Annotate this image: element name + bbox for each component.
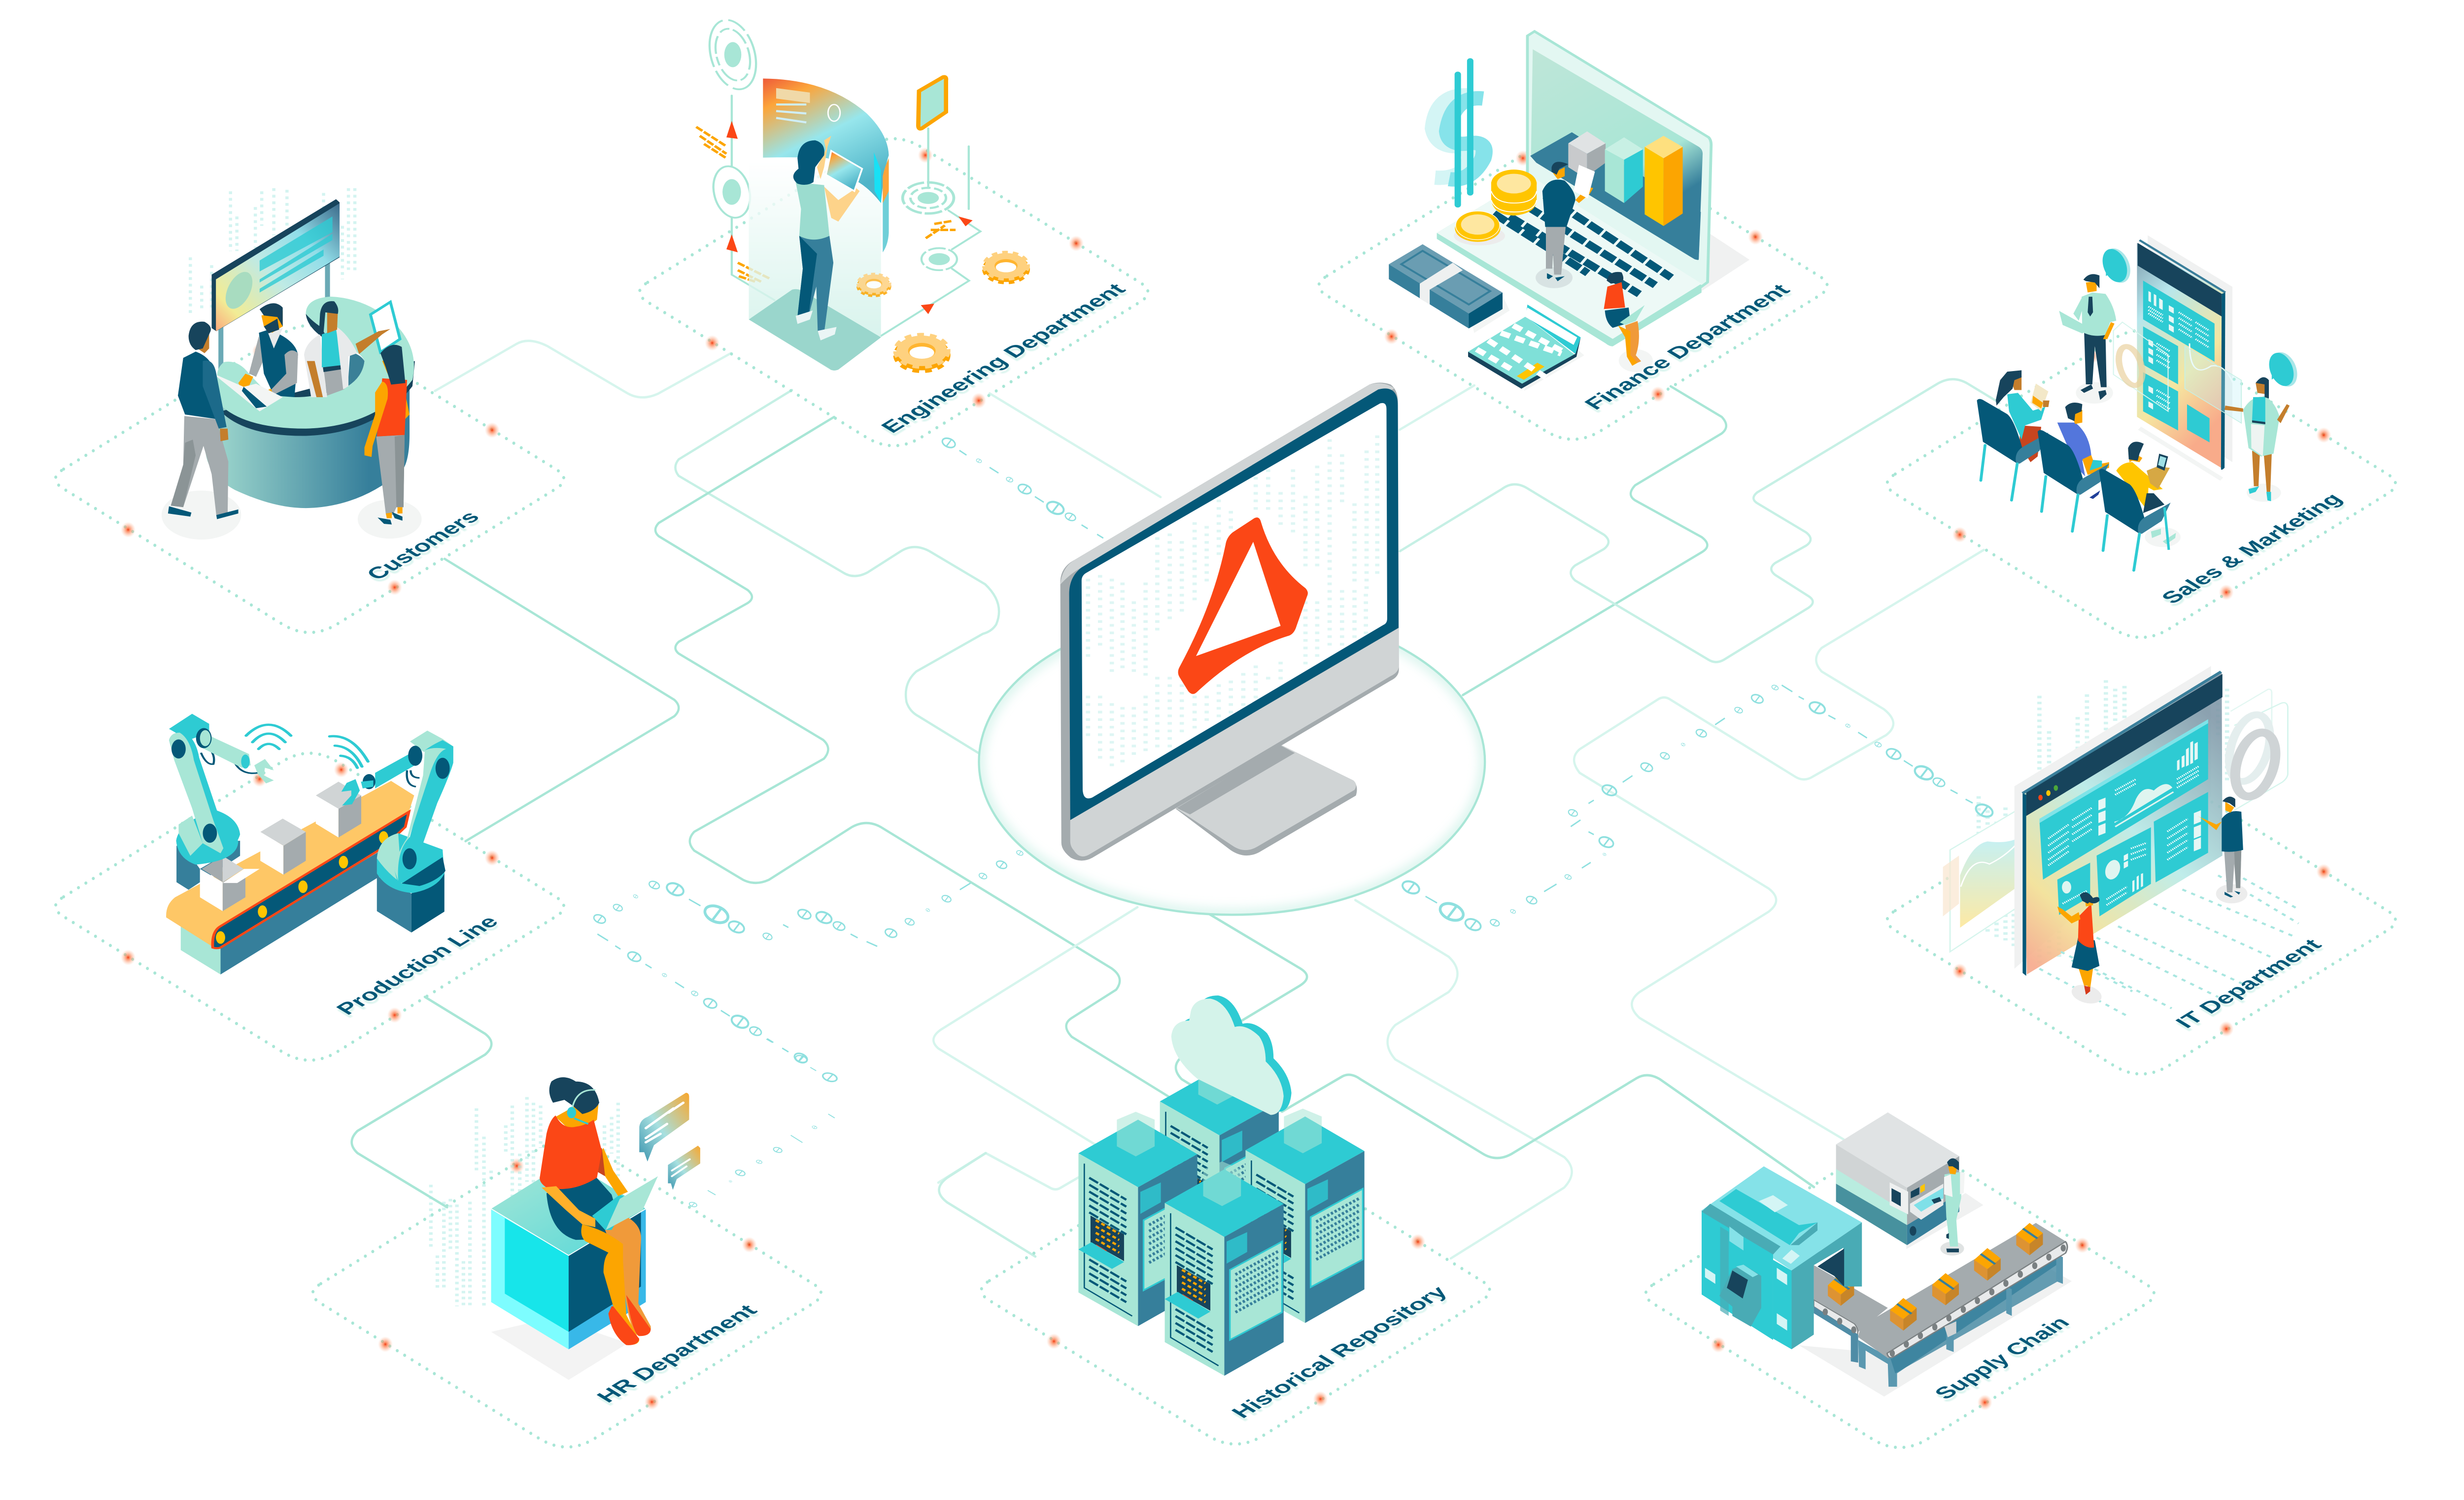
conveyor bbox=[1814, 1223, 2067, 1387]
left robot arm bbox=[169, 714, 274, 865]
laptop bbox=[1437, 32, 1749, 346]
platform ellipse bbox=[978, 646, 1486, 916]
customer woman bbox=[365, 345, 410, 524]
right robot arm bbox=[342, 731, 453, 893]
dotted platform: engineering bbox=[640, 139, 1148, 445]
front server bbox=[1165, 1161, 1284, 1376]
cash bundle bbox=[1389, 244, 1509, 333]
floor shadows bbox=[162, 490, 422, 540]
illustration: engineering bbox=[696, 16, 1027, 371]
floor shadows bbox=[1799, 1193, 2072, 1397]
label: Sales & Marketing: Sales & Marketing bbox=[2156, 490, 2348, 607]
back server bbox=[1160, 1060, 1279, 1274]
staff man bbox=[239, 303, 298, 404]
illustration: historical repository bbox=[1078, 995, 1365, 1376]
customer man bbox=[168, 322, 239, 519]
presenter woman bbox=[2224, 377, 2290, 502]
target rings bbox=[703, 16, 957, 270]
label: Finance Department: Finance Department bbox=[1579, 280, 1795, 413]
binary trail: right bbox=[1401, 684, 2025, 932]
reception desk bbox=[205, 261, 415, 508]
connector lines: right side bbox=[1355, 379, 1999, 1259]
laptop bbox=[217, 375, 283, 411]
woman bbox=[2057, 892, 2105, 1007]
ghost donut panel bbox=[2223, 689, 2288, 810]
illustration: customers bbox=[162, 188, 422, 540]
browser panel bbox=[2015, 666, 2223, 976]
bar chart bbox=[1568, 132, 1683, 226]
dotted platform: historical repository bbox=[981, 1137, 1490, 1444]
right server bbox=[1245, 1109, 1365, 1323]
binary trail: left bbox=[593, 437, 1103, 1064]
dashboard panel bbox=[2137, 236, 2232, 479]
red arrows bbox=[726, 121, 973, 314]
man with report bbox=[1536, 162, 1595, 288]
illustration: HR department bbox=[431, 1077, 700, 1380]
info screen bbox=[211, 199, 340, 331]
illustration: sales and marketing bbox=[1977, 236, 2301, 571]
conveyor bbox=[166, 781, 445, 975]
operator bbox=[1931, 1159, 1965, 1256]
code dashes bbox=[696, 127, 956, 282]
screen binary rain bbox=[1088, 436, 1377, 767]
dotted platform: production line bbox=[56, 753, 564, 1060]
illustration: finance bbox=[1389, 32, 1749, 391]
dotted platform: finance bbox=[1319, 132, 1827, 440]
dotted platform: IT bbox=[1887, 767, 2396, 1074]
data rain bbox=[190, 188, 355, 314]
monitor stand bbox=[1176, 745, 1357, 855]
label: Engineering Department: Engineering Department bbox=[876, 280, 1131, 437]
industrial oven bbox=[1836, 1112, 1959, 1245]
dollar symbol bbox=[1433, 58, 1484, 207]
illustration: supply chain bbox=[1702, 1112, 2072, 1397]
network lines bbox=[732, 96, 981, 336]
monitor body bbox=[1061, 383, 1399, 861]
central monitor with platform bbox=[979, 383, 1485, 915]
speech bubbles bbox=[2098, 246, 2301, 389]
gears bbox=[858, 253, 1027, 370]
coins bbox=[1454, 170, 1537, 245]
floor shadow bbox=[491, 1318, 628, 1380]
illustration: production line bbox=[166, 714, 453, 975]
ghost chart panel bbox=[1943, 799, 2036, 952]
calculator bbox=[1468, 305, 1584, 391]
holo donut and chart bbox=[2114, 322, 2241, 423]
connector lines: bottom and lower left bbox=[352, 871, 1814, 1257]
floating cube bbox=[491, 1160, 646, 1349]
holo card bbox=[918, 77, 946, 129]
parcels bbox=[1828, 1223, 2043, 1330]
packing machine bbox=[1702, 1166, 1862, 1349]
man bbox=[2197, 797, 2248, 903]
label: Historical Repository: Historical Repository bbox=[1226, 1283, 1453, 1422]
label: IT Department: IT Department bbox=[2170, 936, 2327, 1031]
keyboard bbox=[1494, 196, 1672, 294]
wifi signals bbox=[246, 725, 368, 768]
label: Supply Chain: Supply Chain bbox=[1929, 1313, 2075, 1403]
presenter man bbox=[2059, 274, 2116, 404]
label: Customers: Customers bbox=[361, 508, 485, 583]
curved holo screen bbox=[749, 78, 889, 370]
glass floor bbox=[749, 289, 881, 371]
woman with headset bbox=[540, 1077, 658, 1345]
staff woman bbox=[304, 301, 400, 397]
logo bbox=[1178, 517, 1308, 694]
woman with laptop bbox=[1604, 272, 1653, 372]
floor binary bbox=[2039, 875, 2298, 1017]
data rain bbox=[1979, 680, 2227, 963]
illustration: IT department bbox=[1943, 666, 2298, 1017]
dotted platform: HR bbox=[313, 1140, 821, 1447]
engineer bbox=[793, 136, 862, 341]
audience bbox=[1977, 370, 2181, 571]
binary trail: near HR bbox=[688, 1039, 838, 1208]
connector lines: left side bbox=[435, 341, 1169, 1190]
cloud bbox=[1171, 995, 1292, 1115]
dashboard cards bbox=[2039, 719, 2208, 917]
left robot base bbox=[176, 841, 240, 890]
chat bubbles bbox=[639, 1093, 700, 1190]
dotted platform: sales and marketing bbox=[1887, 330, 2396, 638]
data rain bbox=[431, 1097, 618, 1306]
dotted platform: customers bbox=[56, 325, 564, 633]
label: HR Department: HR Department bbox=[591, 1301, 762, 1406]
dotted platform: supply chain bbox=[1645, 1140, 2154, 1448]
boxes on belt bbox=[190, 782, 361, 911]
left server bbox=[1078, 1112, 1198, 1326]
label: Production Line: Production Line bbox=[331, 913, 504, 1018]
